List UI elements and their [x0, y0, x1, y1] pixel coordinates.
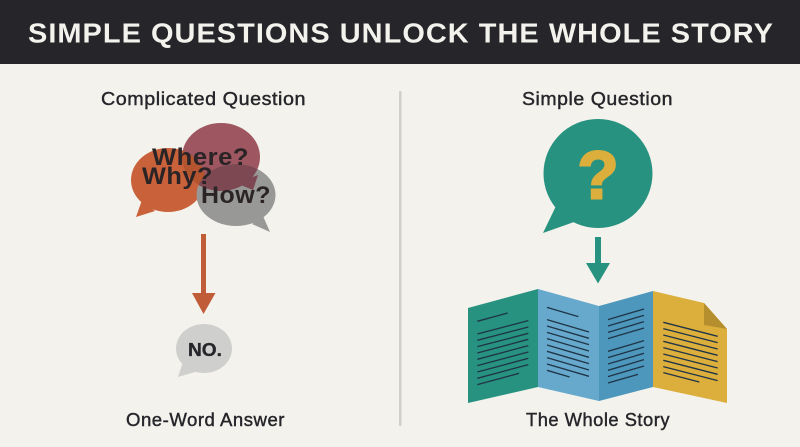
label: where: Where?: [152, 144, 249, 171]
icon: overlapping speech bubbles: [131, 123, 276, 232]
label: how: How?: [201, 182, 271, 209]
bubble: gray: [196, 164, 276, 232]
heading: simple question: Simple Question: [522, 89, 673, 109]
folded corner: [704, 303, 727, 329]
caption: one-word answer: One-Word Answer: [126, 410, 285, 430]
icon: teal question bubble: [543, 119, 652, 233]
panel: blue fold: [599, 291, 653, 401]
icon: no speech bubble: [176, 324, 232, 377]
bubble: orange: [131, 148, 205, 217]
panel: light blue fold: [538, 289, 599, 401]
heading: complicated question: Complicated Question: [101, 89, 306, 109]
overlap: orange and maroon: [182, 150, 204, 187]
center divider: [399, 91, 402, 426]
panel: teal fold: [468, 289, 538, 403]
panel: yellow fold: [653, 291, 727, 403]
arrow: teal down: [586, 237, 610, 284]
icon: folded document: [468, 289, 727, 403]
title banner: SIMPLE QUESTIONS UNLOCK THE WHOLE STORY: [28, 18, 774, 48]
caption: the whole story: The Whole Story: [526, 410, 670, 430]
overlap: maroon and gray: [198, 164, 258, 191]
text lines: [477, 307, 718, 385]
bubble: maroon: [182, 123, 260, 191]
question mark: ?: [577, 138, 619, 214]
title banner: [0, 0, 800, 64]
label: why: Why?: [142, 163, 213, 190]
arrow: orange down: [192, 234, 216, 314]
label: no: NO.: [188, 340, 222, 360]
